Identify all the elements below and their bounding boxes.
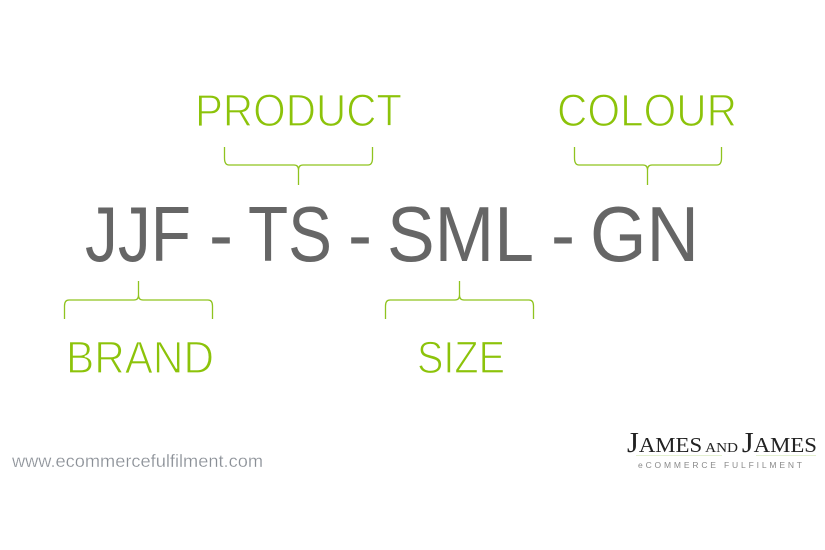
logo: James and James [627, 428, 817, 470]
logo underline [636, 454, 816, 456]
label: size: SIZE [417, 332, 505, 383]
heading: SKU code: - [348, 190, 372, 278]
heading: SKU code: - [551, 190, 575, 278]
brace: product [224, 147, 372, 185]
heading: SKU code [85, 190, 699, 278]
label: product: PRODUCT [195, 85, 402, 136]
heading: SKU code: JJF [85, 190, 191, 278]
label: colour: COLOUR [557, 85, 737, 136]
brace: colour [574, 147, 722, 185]
website URL: www.ecommercefulfilment.com [11, 451, 263, 471]
heading: SKU code: GN [590, 190, 699, 278]
logo wordmark: JAMES AND JAMES [627, 428, 817, 459]
brace: size [386, 281, 534, 319]
label: brand: BRAND [66, 332, 214, 383]
logo tagline: eCOMMERCE FULFILMENT [638, 460, 802, 470]
brace: brand [64, 281, 212, 319]
heading: SKU code: SML [387, 190, 534, 278]
heading: SKU code: TS [248, 190, 332, 278]
heading: SKU code: - [209, 190, 233, 278]
